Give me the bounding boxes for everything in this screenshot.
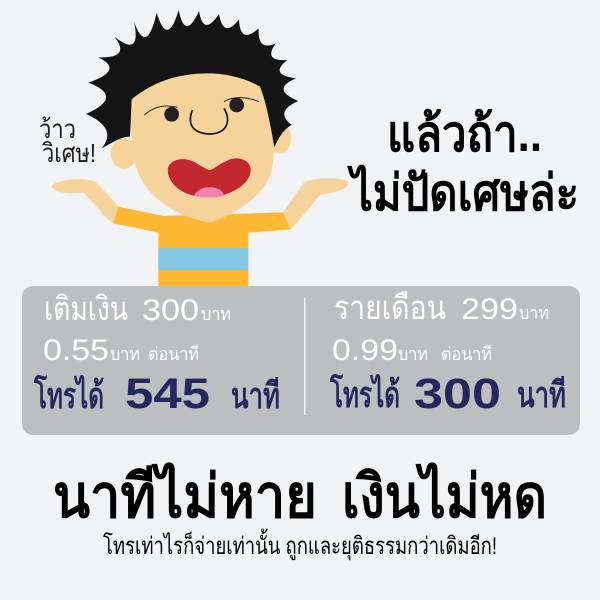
bottom slogan: นาทีไม่หาย (53, 461, 317, 530)
spiky hair (86, 10, 298, 148)
nose (190, 108, 228, 134)
left plan: top-up: เติมเงิน (44, 290, 128, 327)
speech text: ว้าว (39, 114, 76, 144)
left plan: top-up: โทรได้ (33, 374, 104, 416)
left plan: top-up: บาท (201, 304, 231, 324)
left plan: top-up: ต่อนาที (148, 344, 199, 364)
tongue (194, 187, 224, 197)
speech text: วิเศษ! (42, 138, 96, 168)
right plan: monthly: 300 (414, 370, 501, 418)
right plan: monthly: บาท (398, 344, 428, 364)
left eye and brow (144, 106, 179, 122)
left plan: top-up: 545 (125, 370, 210, 418)
bottom subtext: โทรเท่าไรก็จ่ายเท่านั้น ถูกและยุติธรรมกว่าเดิมอีก! (103, 528, 497, 561)
right plan: monthly (329, 289, 566, 418)
headline: แล้วถ้า.. (387, 106, 542, 162)
right plan: monthly: 0.99 (332, 334, 398, 367)
speech text (39, 114, 96, 168)
right plan: monthly: รายเดือน (334, 289, 446, 326)
left plan: top-up: นาที (231, 375, 280, 416)
left arm and hand (52, 179, 120, 223)
grey comparison panel (22, 286, 580, 435)
left plan: top-up: 0.55 (43, 334, 109, 367)
right ear (269, 123, 291, 154)
left plan: top-up: บาท (110, 344, 140, 364)
face (130, 57, 274, 223)
bottom slogan (53, 461, 547, 530)
left ear (111, 138, 137, 169)
open mouth (168, 158, 251, 197)
right plan: monthly: 299 (461, 293, 518, 326)
headline (347, 106, 579, 221)
bottom slogan: เงินไม่หด (342, 461, 547, 530)
striped shirt (113, 207, 291, 286)
right arm and hand (283, 178, 348, 229)
left plan: top-up (33, 290, 280, 418)
cartoon character (52, 10, 348, 286)
right plan: monthly: ต่อนาที (441, 344, 492, 364)
left plan: top-up: 300 (142, 294, 199, 327)
right eye and brow (224, 98, 259, 112)
right plan: monthly: นาที (517, 374, 566, 415)
right plan: monthly: โทรได้ (329, 373, 400, 415)
right plan: monthly: บาท (519, 303, 549, 323)
